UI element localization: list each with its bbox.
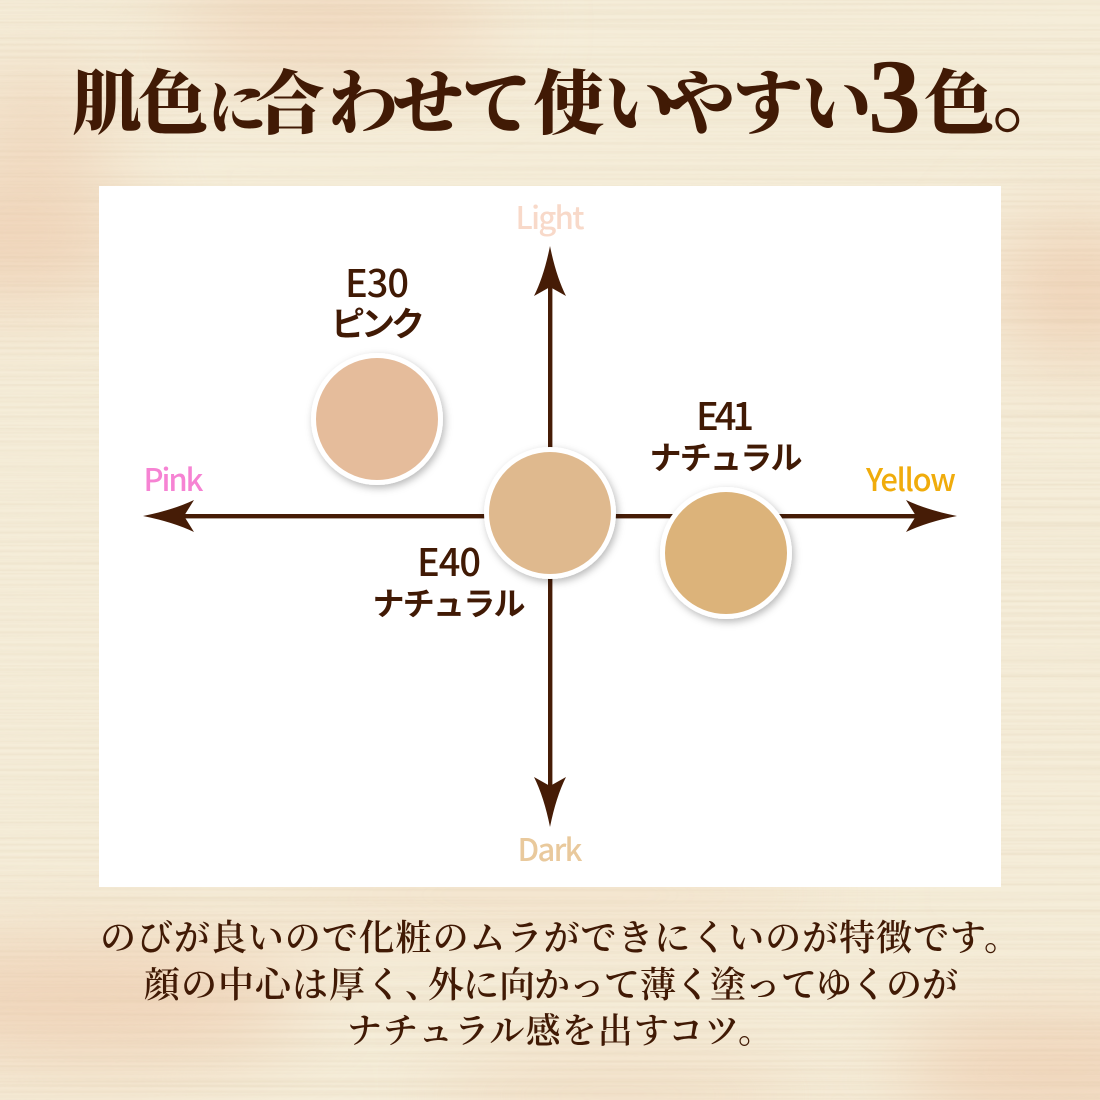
title: 。 <box>992 29 1076 150</box>
title: に <box>208 61 266 145</box>
label: E40 natural: ナチュラル <box>372 579 526 625</box>
label: E41 natural: ナチュラル <box>650 433 802 479</box>
label: Light: Light <box>516 193 584 238</box>
label: E30 pink: E30 <box>345 253 409 308</box>
vertical axis arrow <box>534 246 566 827</box>
label: E40 natural <box>372 532 526 625</box>
panel: chart <box>99 186 1001 887</box>
title: 色 <box>924 48 994 149</box>
title: 肌色 <box>72 48 208 149</box>
label: Yellow: Yellow <box>865 455 956 500</box>
description text: のびが良いので化粧のムラができにくいのが特徴です。 <box>100 910 1020 961</box>
label: E30 pink <box>331 253 425 346</box>
horizontal axis arrow <box>143 500 957 532</box>
swatch: E40 <box>486 450 614 576</box>
title: 合わせて使いやすい <box>255 48 872 149</box>
description text <box>100 910 1020 1054</box>
title: 3 <box>868 38 921 155</box>
swatch: E30 <box>314 356 440 482</box>
description text: ナチュラル感を出すコツ。 <box>347 1004 773 1054</box>
label: E40 natural: E40 <box>417 532 481 587</box>
label: Pink: Pink <box>144 455 204 500</box>
swatch: E41 <box>662 490 790 616</box>
label: E41 natural: E41 <box>696 386 754 441</box>
label: Dark: Dark <box>518 825 583 870</box>
label: E41 natural <box>650 386 802 479</box>
label: E30 pink: ピンク <box>331 297 425 346</box>
description text: 顔の中心は厚く、外に向かって薄く塗ってゆくのが <box>144 957 958 1008</box>
